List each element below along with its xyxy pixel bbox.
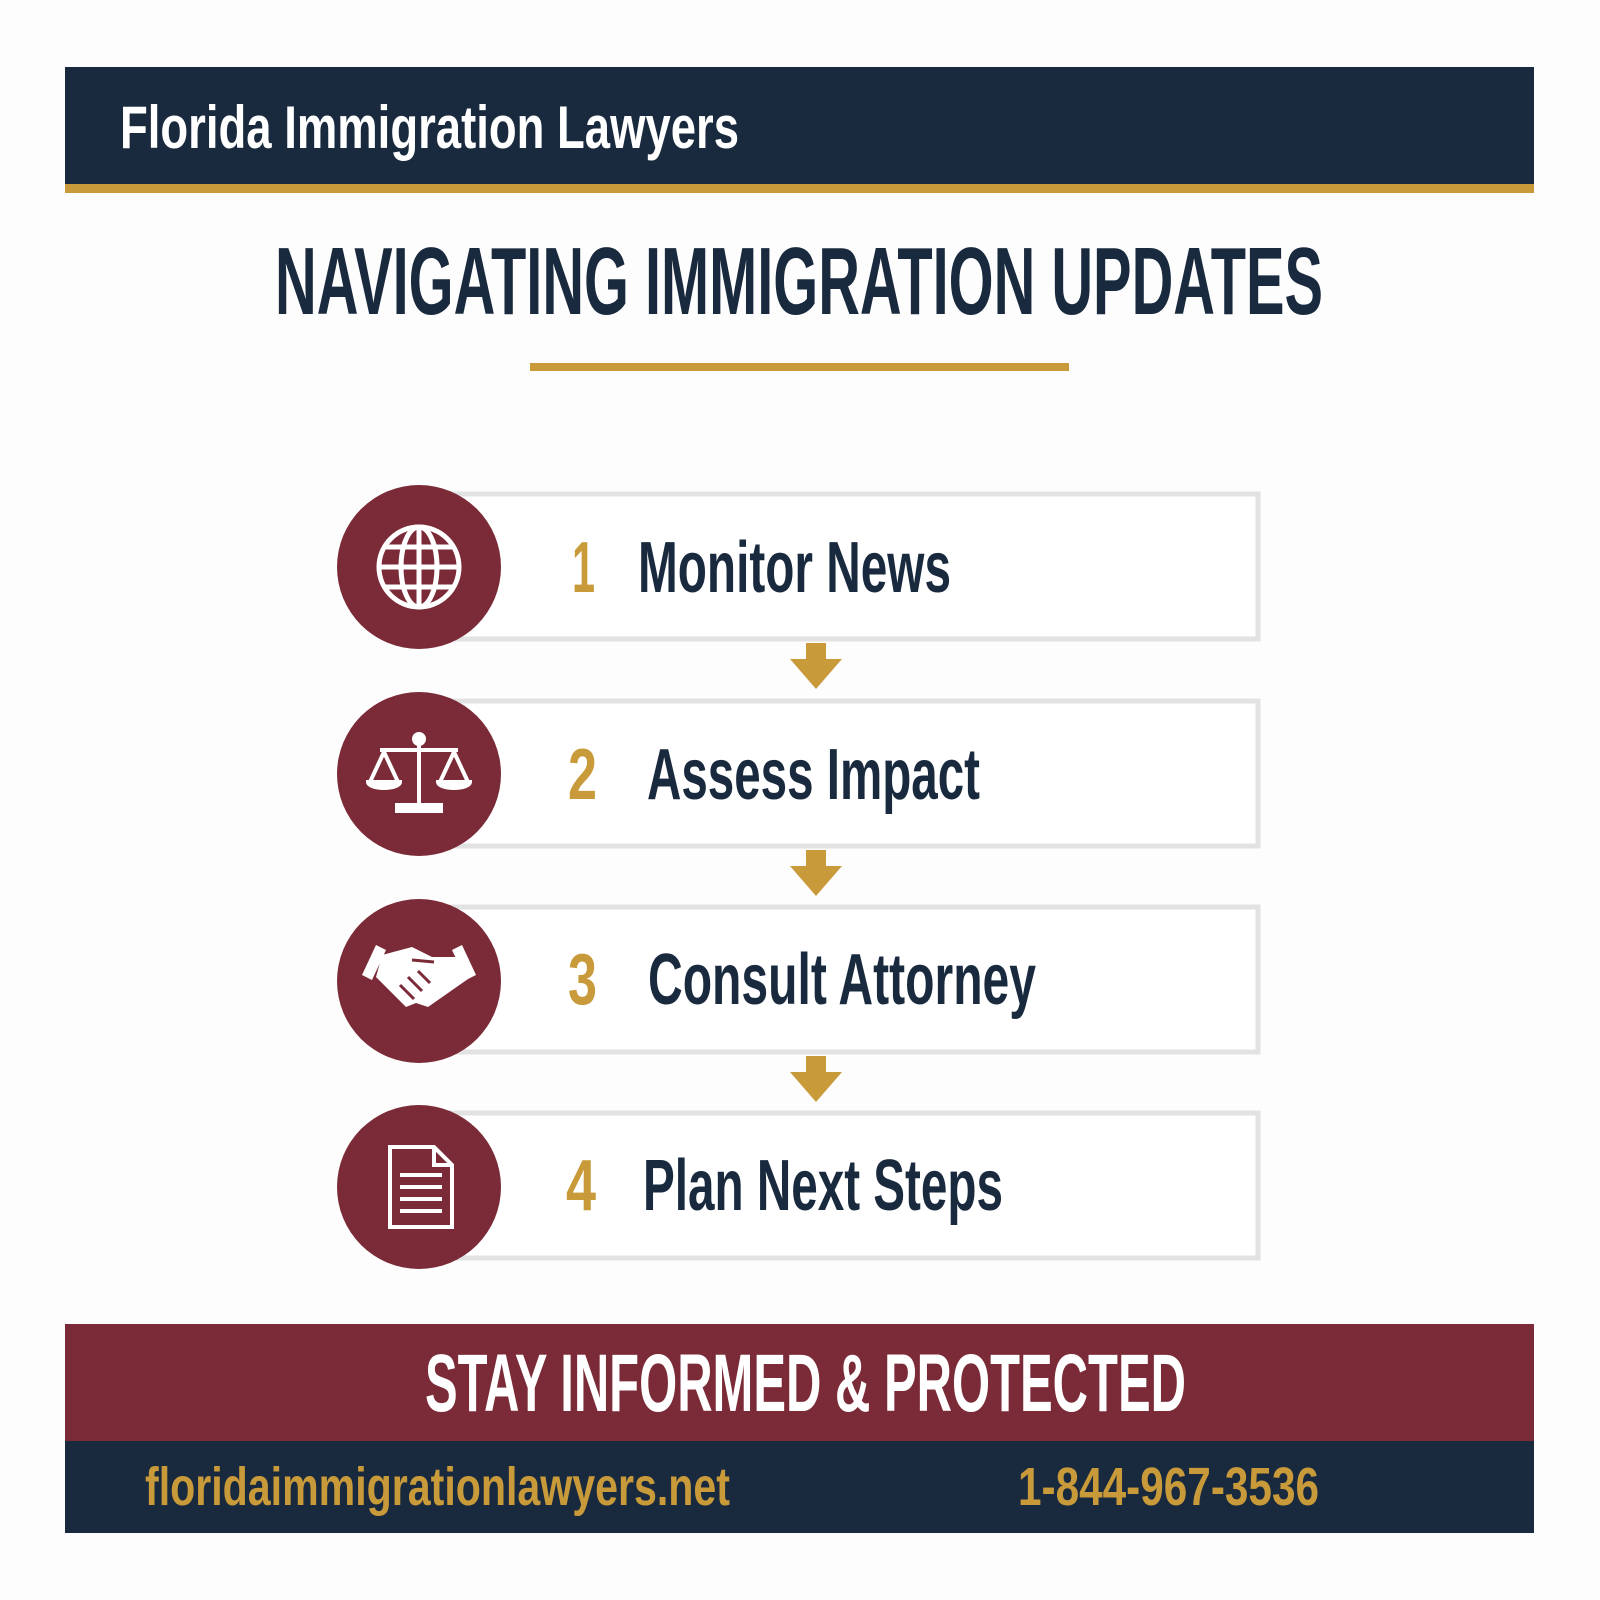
step 3: 3 bbox=[568, 940, 597, 1020]
step 4 bbox=[337, 1105, 1258, 1269]
step 3: Consult Attorney bbox=[648, 940, 1036, 1020]
step 4: 4 bbox=[566, 1146, 596, 1226]
header brand text: Florida Immigration Lawyers bbox=[120, 94, 739, 161]
footer contact bar: floridaimmigrationlawyers.net bbox=[145, 1457, 730, 1517]
step 1 bbox=[337, 485, 1258, 649]
icon: globe bbox=[379, 527, 459, 607]
step 2 bbox=[337, 692, 1258, 856]
banner: stay informed bbox=[65, 1324, 1534, 1442]
step 2: Assess Impact bbox=[647, 735, 980, 815]
arrow 1 bbox=[790, 643, 842, 689]
step 2: 2 bbox=[568, 735, 597, 815]
arrow 2 bbox=[790, 850, 842, 896]
icon: handshake bbox=[362, 945, 476, 1007]
arrow 3 bbox=[790, 1056, 842, 1102]
title underline bbox=[530, 363, 1069, 371]
footer contact bar: 1-844-967-3536 bbox=[1018, 1457, 1319, 1517]
icon: document bbox=[390, 1147, 452, 1227]
icon: scales bbox=[368, 734, 470, 811]
header bar bbox=[65, 67, 1534, 193]
footer contact bar bbox=[65, 1441, 1534, 1533]
step 1: 1 bbox=[572, 528, 595, 608]
step 3 bbox=[337, 899, 1258, 1063]
step 4: Plan Next Steps bbox=[643, 1146, 1003, 1226]
step 1: Monitor News bbox=[638, 528, 951, 608]
